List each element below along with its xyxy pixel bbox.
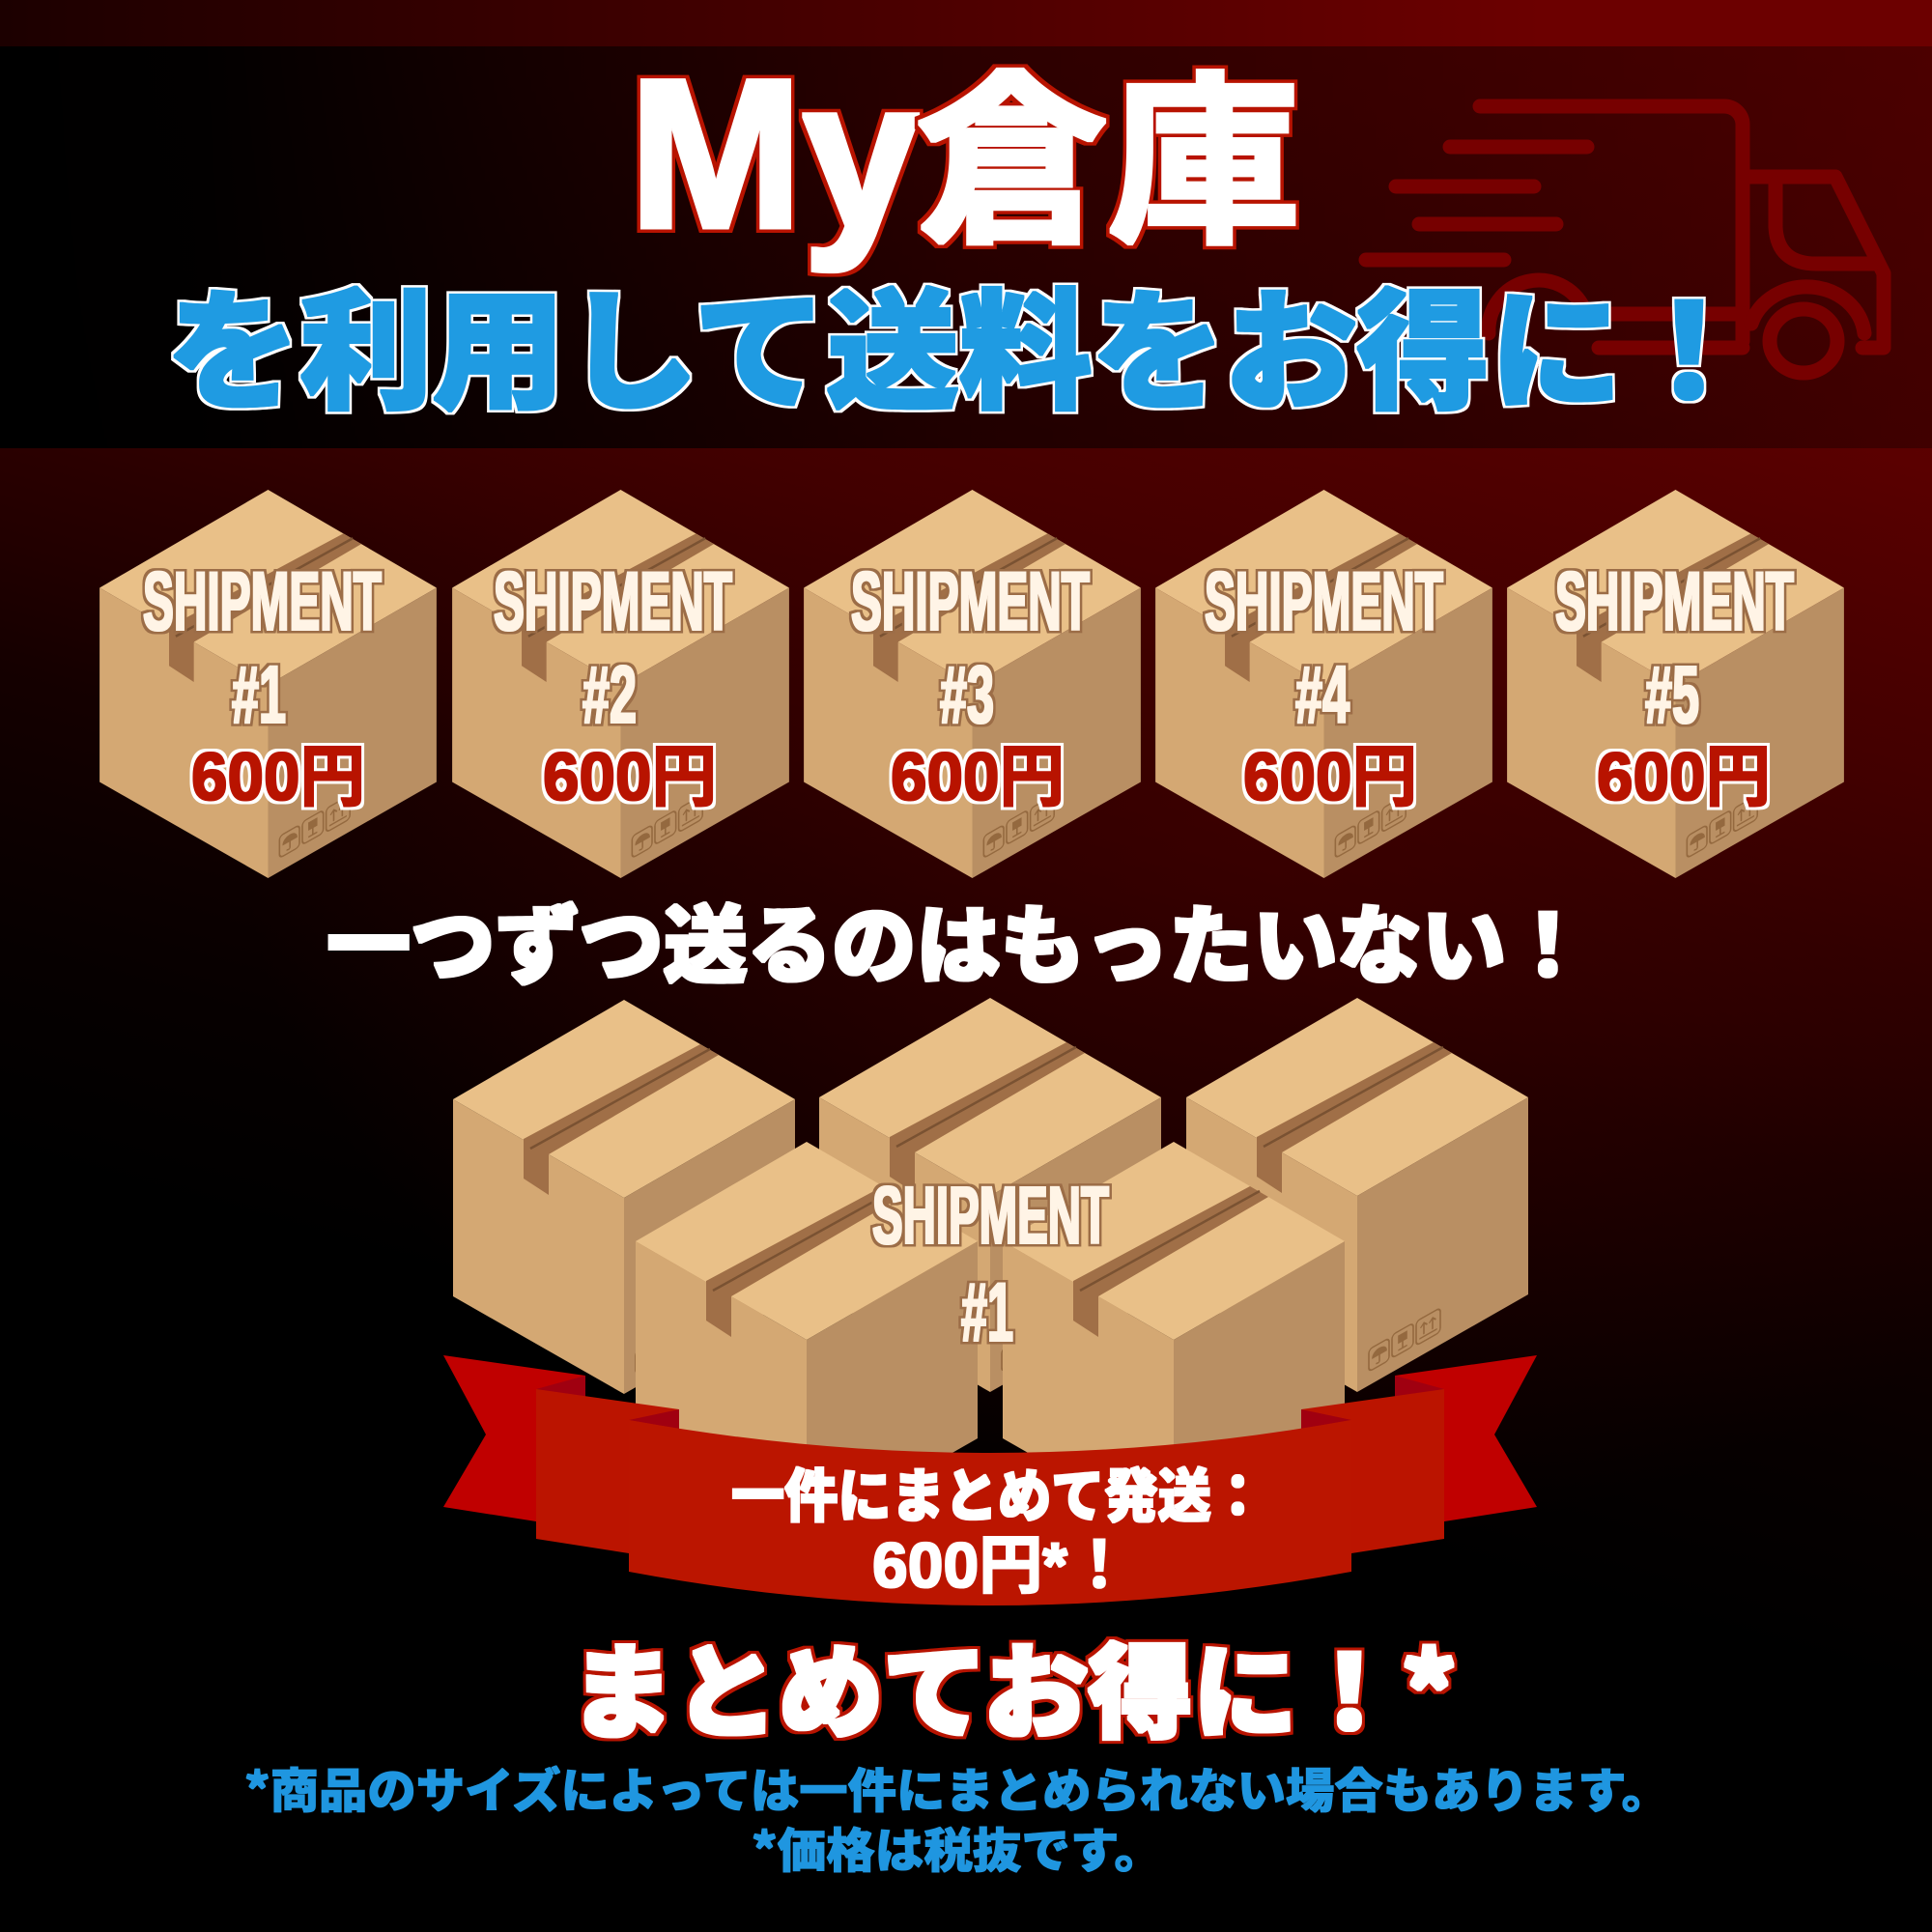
shipment box 2: SHIPMENT [494, 555, 732, 648]
title: My倉庫 [629, 35, 1300, 272]
shipment box 4: 600円 [1243, 739, 1417, 814]
combined shipment label [872, 1170, 1109, 1359]
ribbon text: 一件にまとめて発送： [731, 1450, 1264, 1534]
footnote: tax: *価格は税抜です。 [752, 1813, 1163, 1882]
ribbon left tail [443, 1355, 585, 1521]
shipment box 5: 600円 [1597, 739, 1771, 814]
shipment box 4: SHIPMENT [1205, 555, 1443, 648]
title: My倉庫: My [629, 35, 919, 272]
combined shipment label: SHIPMENT [872, 1170, 1109, 1261]
shipment box 3: SHIPMENT [851, 555, 1090, 648]
shipment box 4 [1155, 490, 1492, 878]
middle heading: 一つずつ送るのはもったいない！ [327, 878, 1590, 1001]
shipment box 1: SHIPMENT [143, 555, 382, 648]
shipment box 5: #5 [1645, 649, 1699, 740]
shipment box 5 [1507, 490, 1844, 878]
shipment box 4: #4 [1295, 649, 1350, 740]
header panel [0, 35, 1932, 448]
shipment box 2: #2 [582, 649, 637, 740]
shipment box 2 [452, 490, 789, 878]
footnote: item size: *商品のサイズによっては一件にまとめられない場合もあります。 [244, 1753, 1670, 1822]
top accent band [0, 0, 1932, 46]
shipment box 3: #3 [940, 649, 994, 740]
ribbon price: 600円*！ [872, 1529, 1131, 1601]
savings heading: まとめてお得に！* [570, 1610, 1457, 1759]
combined boxes group [453, 998, 1528, 1536]
subtitle: を利用して送料をお得に！ [167, 246, 1755, 436]
ribbon banner [443, 1355, 1537, 1605]
shipment box 2: 600円 [543, 739, 717, 814]
shipment box 1: #1 [232, 649, 286, 740]
ribbon right tail [1395, 1355, 1537, 1521]
combined shipment label: #1 [961, 1266, 1013, 1359]
background glow [242, 97, 1932, 1546]
icon: delivery truck [1366, 106, 1884, 373]
shipment box 3 [804, 490, 1141, 878]
title: My倉庫: 倉庫 [916, 62, 1300, 267]
shipment box 1 [99, 490, 437, 878]
shipment box 3: 600円 [891, 739, 1065, 814]
shipment box 1: 600円 [191, 739, 365, 814]
